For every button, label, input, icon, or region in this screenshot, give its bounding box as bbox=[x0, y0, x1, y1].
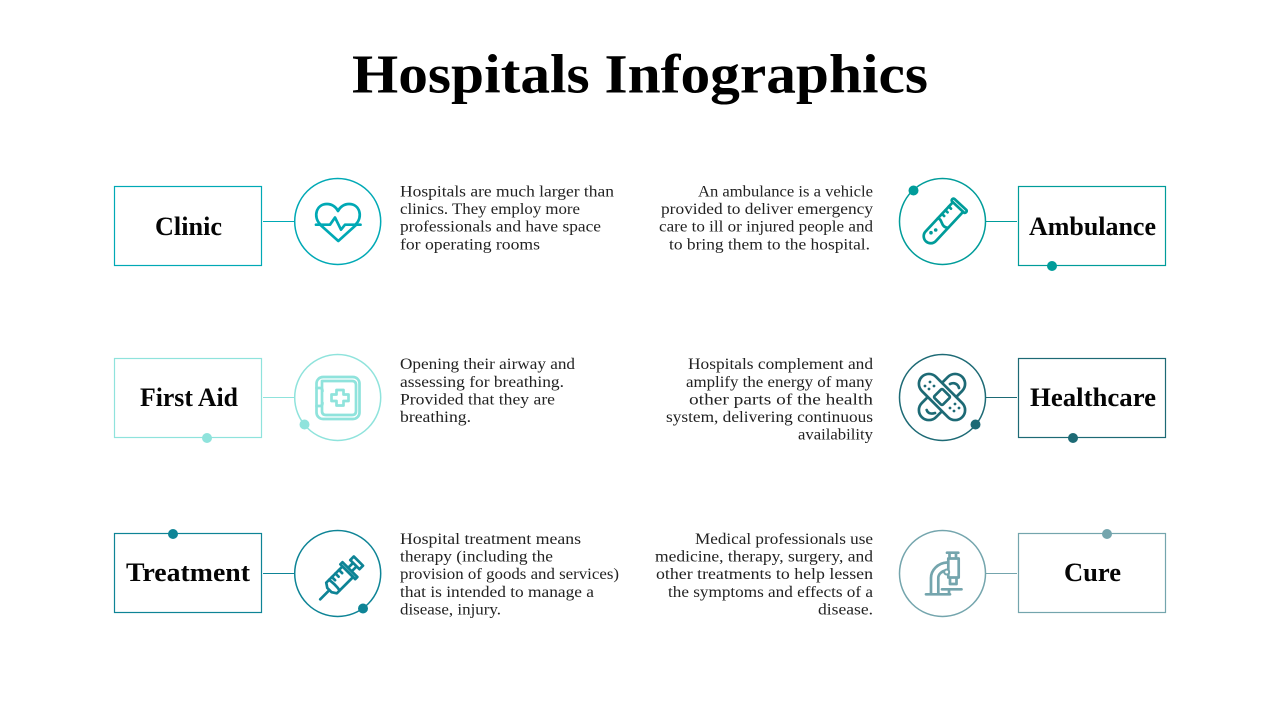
text: treatment: Hospital treatment means bbox=[400, 531, 581, 548]
text: ambulance bbox=[659, 183, 873, 253]
label box: first aid bbox=[114, 358, 262, 443]
icon: microscope bbox=[900, 530, 986, 616]
label box: healthcare: Healthcare bbox=[1030, 383, 1156, 412]
label box: treatment bbox=[114, 529, 262, 612]
connector: treatment bbox=[263, 572, 295, 574]
connector: ambulance bbox=[986, 220, 1017, 222]
panel: healthcare bbox=[666, 354, 1166, 444]
text: treatment bbox=[400, 531, 619, 618]
panel: clinic bbox=[114, 178, 614, 266]
text: cure: the symptoms and effects of a bbox=[668, 584, 873, 601]
text: first aid: Opening their airway and bbox=[400, 356, 575, 373]
label box: clinic bbox=[114, 186, 262, 266]
text: healthcare: amplify the energy of many bbox=[686, 374, 873, 391]
icon: test tube bbox=[900, 178, 986, 264]
label box: ambulance: Ambulance bbox=[1029, 212, 1156, 241]
panel: first aid bbox=[114, 354, 575, 443]
text: healthcare: Hospitals complement and bbox=[688, 356, 873, 373]
text: first aid: assessing for breathing. bbox=[400, 374, 564, 391]
label box: ambulance bbox=[1018, 186, 1166, 271]
text: clinic: professionals and have space bbox=[400, 218, 601, 236]
label box: cure: Cure bbox=[1064, 558, 1121, 587]
text: cure: disease. bbox=[818, 602, 873, 618]
icon: heart with pulse bbox=[295, 178, 381, 264]
icon: crossed bandages bbox=[900, 354, 986, 440]
text: treatment: disease, injury. bbox=[400, 602, 501, 618]
panel: ambulance bbox=[659, 178, 1166, 271]
panel: treatment bbox=[114, 529, 619, 618]
text: healthcare: system, delivering continuous bbox=[666, 409, 873, 426]
icon: syringe bbox=[295, 530, 381, 616]
text: clinic: for operating rooms bbox=[400, 236, 540, 253]
text: healthcare: other parts of the health bbox=[689, 392, 873, 408]
label box: first aid: First Aid bbox=[140, 383, 239, 412]
text: ambulance: provided to deliver emergency bbox=[661, 201, 873, 218]
connector: healthcare bbox=[986, 396, 1017, 398]
text: treatment: therapy (including the bbox=[400, 548, 553, 566]
label box: healthcare bbox=[1018, 358, 1166, 443]
text: clinic bbox=[400, 183, 614, 253]
text: first aid bbox=[400, 356, 575, 426]
text: first aid: breathing. bbox=[400, 409, 471, 426]
panel: cure bbox=[655, 529, 1166, 618]
text: first aid: Provided that they are bbox=[400, 392, 555, 408]
connector: cure bbox=[986, 572, 1017, 574]
text: treatment: that is intended to manage a bbox=[400, 584, 594, 601]
icon: first aid kit bbox=[295, 354, 381, 440]
text: cure bbox=[655, 531, 873, 618]
text: treatment: provision of goods and services) bbox=[400, 566, 619, 583]
connector: first aid bbox=[263, 396, 295, 398]
connector: clinic bbox=[263, 220, 295, 222]
text: clinic: clinics. They employ more bbox=[400, 201, 580, 218]
text: healthcare bbox=[666, 356, 873, 444]
text: ambulance: care to ill or injured people and bbox=[659, 218, 873, 236]
text: cure: other treatments to help lessen bbox=[656, 566, 873, 583]
text: ambulance: to bring them to the hospital. bbox=[669, 236, 870, 253]
text: cure: medicine, therapy, surgery, and bbox=[655, 548, 873, 566]
text: cure: Medical professionals use bbox=[695, 531, 873, 548]
text: clinic: Hospitals are much larger than bbox=[400, 183, 614, 200]
text: ambulance: An ambulance is a vehicle bbox=[698, 183, 873, 200]
label box: cure bbox=[1018, 529, 1166, 612]
label box: clinic: Clinic bbox=[155, 212, 222, 241]
title: Hospitals Infographics bbox=[352, 44, 928, 104]
label box: treatment: Treatment bbox=[126, 558, 250, 587]
text: healthcare: availability bbox=[798, 426, 873, 444]
